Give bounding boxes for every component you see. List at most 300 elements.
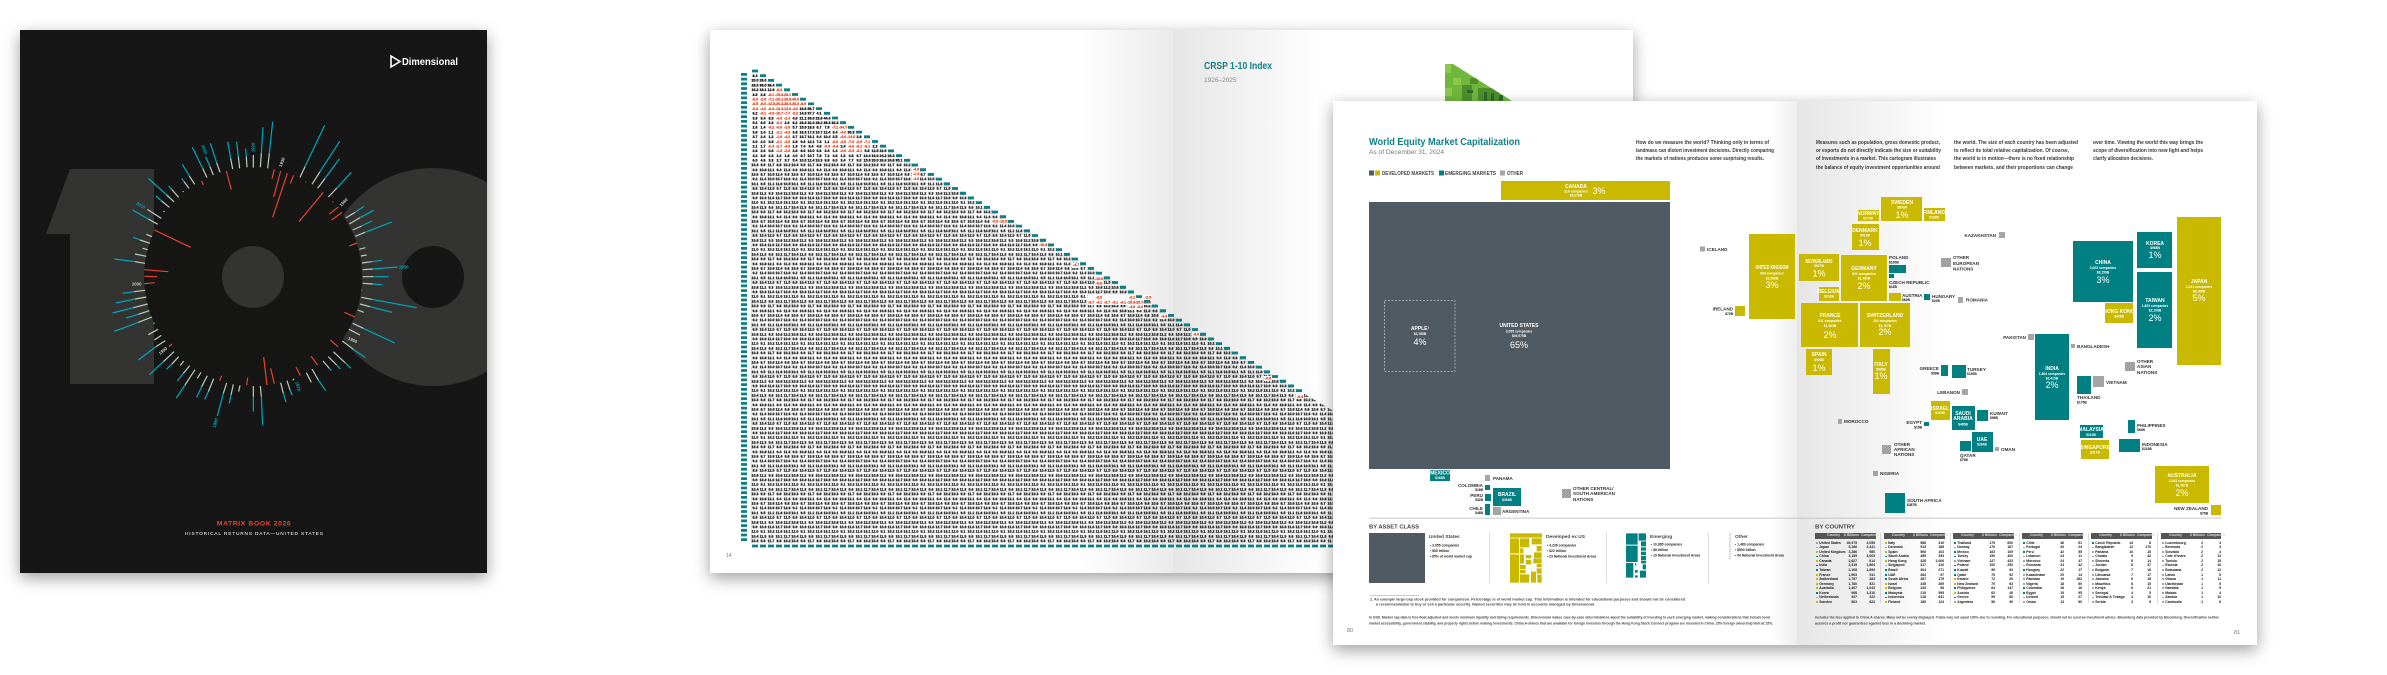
paragraph column 2: between markets, and their proportions can change xyxy=(1954,165,2073,171)
paragraph column 1: the balance of equity investment opportunities around xyxy=(1816,165,1940,171)
matrix red negative cells: -3.7 xyxy=(1088,300,1094,304)
matrix top rows: -1.3 xyxy=(776,149,782,153)
matrix top rows: -4.0 xyxy=(784,140,790,144)
asset class: Emerging: ▪ 19 National Investment Areas xyxy=(1651,554,1700,558)
other African nations xyxy=(1882,442,1915,457)
country: Taiwan xyxy=(2137,272,2172,348)
country table 2: $ Billions xyxy=(1913,533,1928,537)
country: Korea: $968B xyxy=(2150,246,2160,250)
asset class: United States: ▪ 3,055 companies xyxy=(1430,544,1459,548)
matrix top rows: 3.3 xyxy=(768,159,774,163)
matrix top rows: -2.1 xyxy=(776,140,782,144)
matrix top rows: -0.3 xyxy=(768,144,774,148)
matrix top rows: -4.8 xyxy=(848,144,854,148)
country: Egypt xyxy=(1906,420,1929,430)
matrix top rows: 4.8 xyxy=(832,154,838,158)
matrix top rows: 7.8 xyxy=(824,126,830,130)
paragraph column 1: or exports do not directly indicate the size or suitability xyxy=(1816,148,1941,154)
matrix top rows: -2.0 xyxy=(840,140,846,144)
country table 3: Thailand Norway Mexico Turkey Vietnam Poland Kuwait Qatar Ireland New Zealand Philippines Austria Greece Argentina xyxy=(1957,541,1978,604)
country: Chile: CHILE xyxy=(1469,506,1483,511)
matrix top rows: 12.1 xyxy=(808,140,814,144)
country: Malaysia xyxy=(2078,425,2104,438)
country: United States with Apple callout: 3,055 companies xyxy=(1506,330,1532,334)
matrix top rows: 5.7 xyxy=(792,126,798,130)
country: Panama: PANAMA xyxy=(1493,476,1514,481)
country: Spain: SPAIN xyxy=(1812,352,1827,358)
country: Kuwait: $96B xyxy=(1990,416,1999,420)
matrix top rows: 9.0 xyxy=(856,159,862,163)
legend xyxy=(1369,170,1523,177)
country: South Africa xyxy=(1885,493,1942,513)
country: Bangladesh: BANGLADESH xyxy=(2077,344,2110,349)
matrix top rows: 7.2 xyxy=(824,154,830,158)
matrix top rows: 37.7 xyxy=(808,112,814,116)
country: Netherlands xyxy=(1799,254,1839,281)
matrix top rows: -3.1 xyxy=(856,149,862,153)
other European nations: NATIONS xyxy=(1953,266,1973,272)
matrix top rows: 10.4 xyxy=(824,135,830,139)
country table 6: 2 2 2 2 2 2 2 1 1 1 1 1 1 1 xyxy=(2201,541,2203,604)
country: New Zealand xyxy=(2174,505,2221,516)
paragraph column 2: to reflect its total relative capitalization. Of course, xyxy=(1954,148,2069,154)
country: Switzerland: 263 companies xyxy=(1873,319,1897,323)
country: China: CHINA xyxy=(2095,260,2111,266)
country: China: 3% xyxy=(2096,275,2110,285)
country: United States with Apple callout: UNITED STATES xyxy=(1500,323,1539,329)
country: Saudi Arabia: SAUDI xyxy=(1955,411,1971,417)
country: New Zealand: NEW ZEALAND xyxy=(2174,506,2209,511)
matrix top rows: 3.4 xyxy=(824,149,830,153)
legend: DEVELOPED MARKETS xyxy=(1382,171,1435,177)
matrix top rows: 13.7 xyxy=(800,135,806,139)
matrix top rows: 3.9 xyxy=(752,93,758,97)
matrix top rows: 28.0 xyxy=(760,79,766,83)
matrix top rows: 3.8 xyxy=(792,130,798,134)
matrix top rows: 2.4 xyxy=(760,130,766,134)
matrix top rows: 3.4 xyxy=(832,130,838,134)
matrix top rows: 35.1 xyxy=(896,159,902,163)
matrix top rows: -0.3 xyxy=(824,144,830,148)
disclosure note: assures a profit nor guarantees against loss in a declining market. xyxy=(1815,620,1926,626)
matrix top rows: 2.1 xyxy=(752,144,758,148)
country: Denmark xyxy=(1852,224,1879,250)
country: Qatar xyxy=(1960,441,1976,462)
country: Italy: ITALY xyxy=(1874,362,1888,368)
country: Hungary: $22B xyxy=(1932,299,1941,303)
country: Denmark: 1% xyxy=(1858,238,1872,248)
other Central/South American nations: OTHER CENTRAL/ xyxy=(1573,486,1614,491)
page subheading years: 1926–2025 xyxy=(1204,77,1237,84)
country: Finland: FINLAND xyxy=(1923,210,1945,216)
other Central/South American nations: NATIONS xyxy=(1573,497,1593,502)
matrix top rows: 2.0 xyxy=(760,140,766,144)
matrix top rows: 8.6 xyxy=(800,149,806,153)
footnote 1: 1. An example large-cap stock provided for comparison. Percentage is of world market cap. This information is intended for educational purposes and should not be considered xyxy=(1370,596,1686,602)
country table 3: $ Billions xyxy=(1982,533,1997,537)
country: United States with Apple callout xyxy=(1369,202,1670,469)
country: Poland: POLAND xyxy=(1889,255,1909,260)
cover subtitle: HISTORICAL RETURNS DATA—UNITED STATES xyxy=(185,531,323,537)
matrix top rows: 1.2 xyxy=(768,135,774,139)
matrix top rows: 18.3 xyxy=(808,126,814,130)
matrix top rows: 8.3 xyxy=(768,116,774,120)
asset class: Developed ex US: ▪ 23 National Investment Areas xyxy=(1547,554,1596,558)
country: Poland: $100B xyxy=(1889,260,1899,264)
matrix top rows: -4.0 xyxy=(792,107,798,111)
matrix year axis bottom xyxy=(752,545,1333,547)
country: Czech Republic: $13B xyxy=(1889,285,1898,289)
country: France xyxy=(1801,303,1858,347)
country: United Arab Emirates: $284B xyxy=(1977,442,1987,446)
matrix top rows: -1.9 xyxy=(776,135,782,139)
country table 4: 46 40 32 24 24 24 22 20 19 18 16 15 15 13 xyxy=(2060,541,2064,604)
country: Belgium: BELGIUM xyxy=(1817,289,1841,295)
decade labels on radial chart: 2020 xyxy=(200,144,209,155)
country: Canada: 316 companies xyxy=(1564,190,1588,194)
intro paragraph: the markets of nations produces some surprising results. xyxy=(1636,156,1764,162)
country: Brazil: $304B xyxy=(1502,498,1512,502)
matrix top rows: 2.4 xyxy=(760,135,766,139)
matrix red negative cells: -1.4 xyxy=(913,172,919,176)
matrix top rows: 8.2 xyxy=(792,121,798,125)
asset class: Other: ▪ 1,489 companies xyxy=(1735,542,1764,546)
country: New Zealand: $70B xyxy=(2200,512,2209,516)
country: Pakistan: PAKISTAN xyxy=(2003,335,2027,340)
country table 3: 600 187 105 400 423 250 93 52 20 63 147 40 60 30 xyxy=(2007,541,2013,604)
country: Sweden: SWEDEN xyxy=(1891,200,1913,206)
matrix top rows: -3.4 xyxy=(832,144,838,148)
country table 5 xyxy=(2091,533,2155,604)
matrix top rows: -2.6 xyxy=(784,126,790,130)
country: Austria xyxy=(1889,293,1923,302)
matrix top rows: 38.4 xyxy=(768,83,774,87)
paragraph column 2: the world. The size of each country has been adjusted xyxy=(1954,140,2078,146)
country: Canada xyxy=(1501,181,1670,200)
matrix top rows: -6.5 xyxy=(752,102,758,106)
cartogram: Americas xyxy=(1369,181,1670,515)
country: United Kingdom: UNITED KINGDOM xyxy=(1756,265,1788,271)
matrix top rows: -4.3 xyxy=(776,116,782,120)
country: Oman xyxy=(1995,447,2016,452)
country: Thailand: $175B xyxy=(2077,400,2087,404)
country: Peru: PERU xyxy=(1470,493,1484,498)
country: Pakistan xyxy=(2003,334,2034,340)
matrix top rows: 6.2 xyxy=(752,112,758,116)
methodology note xyxy=(1369,614,1773,626)
country: Lebanon xyxy=(1937,389,1968,395)
country: Philippines: PHILIPPINES xyxy=(2137,423,2166,428)
matrix top rows: 12.5 xyxy=(872,149,878,153)
country: United States with Apple callout: 4% xyxy=(1413,337,1427,347)
panel: open book returns matrix spread xyxy=(710,30,1633,573)
matrix top rows: 12.4 xyxy=(824,130,830,134)
matrix red negative cells: -10.0 xyxy=(1095,277,1103,281)
country: United States with Apple callout: APPLE¹ xyxy=(1411,326,1429,332)
country: France: FRANCE xyxy=(1820,313,1841,319)
matrix top rows: 3.4 xyxy=(840,159,846,163)
matrix top rows: 10.3 xyxy=(816,159,822,163)
matrix top rows: -0.9 xyxy=(848,149,854,153)
cover title: MATRIX BOOK 2026 xyxy=(217,520,291,528)
matrix top rows: 23.8 xyxy=(816,116,822,120)
other European nations xyxy=(1941,255,1980,272)
matrix top rows: 1.1 xyxy=(824,140,830,144)
matrix top rows: 2.6 xyxy=(760,149,766,153)
other African nations: AFRICAN xyxy=(1894,447,1915,452)
matrix red negative cells: -4.3 xyxy=(913,168,919,172)
country: Oman: OMAN xyxy=(2001,447,2016,452)
gutter shading right xyxy=(1173,30,1323,573)
matrix top rows: 33.0 xyxy=(808,116,814,120)
asset class: Other xyxy=(1730,533,1784,560)
matrix top rows: 39.3 xyxy=(824,121,830,125)
country: Israel: ISRAEL xyxy=(1931,406,1949,412)
matrix top rows: -8.9 xyxy=(800,102,806,106)
footnote 1: a recommendation to buy or sell a particular security. Named securities may be held in accounts managed by Dimensional. xyxy=(1376,602,1595,606)
matrix top rows: -3.2 xyxy=(792,112,798,116)
matrix red negative cells: -4.9 xyxy=(913,177,919,181)
matrix top rows: 32.3 xyxy=(808,121,814,125)
matrix top rows: 24.2 xyxy=(880,154,886,158)
matrix top rows: -26.3 xyxy=(775,102,783,106)
matrix top rows: -4.0 xyxy=(840,135,846,139)
country: Lebanon: LEBANON xyxy=(1937,390,1961,395)
matrix red negative cells: -2.1 xyxy=(1129,296,1135,300)
matrix top rows: 4.2 xyxy=(752,154,758,158)
asset class: United States: ▪ $50 trillion xyxy=(1430,549,1449,553)
matrix top rows: -4.6 xyxy=(840,130,846,134)
country: Greece: GREECE xyxy=(1920,366,1939,371)
matrix top rows: -7.1 xyxy=(864,140,870,144)
matrix top rows: -6.3 xyxy=(768,107,774,111)
other Asian nations: ASIAN xyxy=(2137,364,2152,369)
intro paragraph: How do we measure the world? Thinking only in terms of xyxy=(1636,140,1769,146)
country table 3: 175 170 163 150 127 100 96 75 72 70 64 62 59 56 xyxy=(1989,541,1995,604)
paragraph column 3: clarify allocation decisions. xyxy=(2093,156,2153,162)
matrix red negative cells: -3.6 xyxy=(1193,333,1199,337)
cartogram: Europe xyxy=(1700,197,1989,394)
country: Mexico: MEXICO xyxy=(1430,470,1450,476)
footnote 1 xyxy=(1370,596,1686,606)
country: Australia xyxy=(2155,466,2209,503)
matrix top rows: 4.1 xyxy=(816,112,822,116)
country table 3 xyxy=(1953,533,2017,604)
matrix top rows: -28.1 xyxy=(783,93,791,97)
matrix top rows: 7.8 xyxy=(816,154,822,158)
country: Colombia: $16B xyxy=(1475,488,1484,492)
country: Argentina: ARGENTINA xyxy=(1502,509,1530,514)
matrix top rows: 26.6 xyxy=(880,159,886,163)
Dimensional logo: Dimensional xyxy=(402,57,458,68)
country: Finland: $189B xyxy=(1929,216,1939,220)
matrix year axis left xyxy=(741,73,747,541)
country table 6: $ Billions xyxy=(2190,533,2205,537)
matrix top rows: -19.3 xyxy=(775,93,783,97)
country table 1: $ Billions xyxy=(1844,533,1859,537)
matrix top rows: 56.7 xyxy=(808,107,814,111)
matrix top rows: 9.8 xyxy=(864,149,870,153)
page number 80: 80 xyxy=(1347,628,1353,634)
matrix top rows: 14.3 xyxy=(800,112,806,116)
country: Sweden: 1% xyxy=(1895,210,1909,220)
country table 1: 49,975 5,186 3,286 3,159 2,627 2,415 2,108 1,903 1,797 1,780 1,467 968 927 803 xyxy=(1847,541,1857,604)
country: Japan: 2,441 companies xyxy=(2186,285,2212,289)
country: India xyxy=(2035,334,2069,420)
other African nations: OTHER xyxy=(1894,442,1911,447)
matrix top rows: 28.0 xyxy=(752,83,758,87)
country: United Kingdom: 3% xyxy=(1765,280,1779,290)
country: Korea: 1% xyxy=(2148,250,2162,260)
country: Poland xyxy=(1889,255,1909,273)
other European nations: EUROPEAN xyxy=(1953,261,1980,266)
asset class: Other: ▪ $500 billion xyxy=(1735,548,1756,552)
matrix red negative cells: -15.3 xyxy=(1127,300,1135,304)
matrix top rows: -7.1 xyxy=(832,126,838,130)
country: Canada: CANADA xyxy=(1565,184,1587,190)
country: Sweden xyxy=(1881,197,1922,221)
legend: OTHER xyxy=(1507,171,1523,177)
matrix red negative cells xyxy=(912,167,1304,399)
country: Netherlands: NETHERLANDS xyxy=(1806,259,1833,265)
matrix top rows: -3.2 xyxy=(768,126,774,130)
matrix top rows: -13.4 xyxy=(775,107,783,111)
country: Mexico: $163B xyxy=(1435,476,1445,480)
matrix top rows: -12.9 xyxy=(783,107,791,111)
country: India: INDIA xyxy=(2045,366,2059,372)
country: Thailand xyxy=(2077,376,2101,404)
country table 1: Companies xyxy=(1861,533,1879,537)
country table 4: Country xyxy=(2030,533,2043,537)
country: Saudi Arabia: $485B xyxy=(1958,422,1968,426)
matrix top rows: -4.0 xyxy=(760,107,766,111)
matrix top rows: 15.9 xyxy=(864,159,870,163)
country: Switzerland: 2% xyxy=(1878,327,1892,337)
matrix top rows: 23.3 xyxy=(800,121,806,125)
country: France: 511 companies xyxy=(1818,319,1842,323)
matrix top rows: -14.0 xyxy=(847,135,855,139)
matrix top rows: 20.0 xyxy=(752,79,758,83)
matrix top rows: 1.8 xyxy=(784,154,790,158)
country table 5: Czech Republic Bangladesh Panama Croatia Slovenia Jordan Bulgaria Lithuania Jamaica Mauritius Kenya Senegal Trinidad & Tobago Serbia xyxy=(2095,541,2125,604)
matrix top rows: 8.4 xyxy=(808,144,814,148)
matrix top rows: 1.1 xyxy=(768,130,774,134)
matrix top rows: -7.1 xyxy=(768,98,774,102)
disclosure note: Includes the fees applied to China A-shares. Many not be evenly displayed. Totals may not equal 100% due to rounding. For educational purposes; should not be used as investment advice. Bloomberg data provided by Bloomberg. Diversification neither xyxy=(1815,614,2219,620)
methodology note: market accessibility, government stability, and property rights before making investments. China A-shares that are available for foreign investors through the Hong Kong Stock Connect program are included in China. 25% foreign ownership limit at 25%. xyxy=(1369,620,1773,626)
decade labels on radial chart: 1950 xyxy=(399,265,409,270)
country: Singapore xyxy=(2080,440,2111,459)
country: Thailand: THAILAND xyxy=(2077,395,2101,400)
matrix top rows xyxy=(752,74,902,163)
country: United Kingdom: $3,286B xyxy=(1766,276,1779,280)
country: Australia: AUSTRALIA xyxy=(2168,473,2197,479)
matrix top rows: -8.1 xyxy=(856,144,862,148)
country: Netherlands: 1% xyxy=(1812,268,1826,278)
country: Philippines: $64B xyxy=(2137,428,2146,432)
country table 3: Companies xyxy=(1999,533,2017,537)
country: Spain: 1% xyxy=(1812,363,1826,373)
matrix red negative cells: -4.1 xyxy=(1096,300,1102,304)
decade labels on radial chart: 1940 xyxy=(338,197,349,207)
country: Chile xyxy=(1469,504,1490,515)
matrix top rows: 6.0 xyxy=(832,159,838,163)
matrix top rows: 22.9 xyxy=(880,149,886,153)
matrix top rows: -40.0 xyxy=(791,98,799,102)
paragraph column 2 xyxy=(1954,140,2078,171)
asset class: United States: ▪ 65% of world market cap xyxy=(1430,554,1472,558)
matrix top rows: 0.6 xyxy=(768,149,774,153)
country: Japan xyxy=(2177,217,2221,365)
asset class: Developed ex US: Developed ex US xyxy=(1546,534,1586,540)
green heat map chart fragment xyxy=(1445,64,1515,101)
country: Taiwan: TAIWAN xyxy=(2145,298,2165,304)
decade labels on radial chart: 1930 xyxy=(278,156,286,168)
decade labels on radial chart: 1926 xyxy=(251,142,256,152)
other Asian nations xyxy=(2125,359,2157,375)
as-of date: As of December 31, 2024 xyxy=(1369,149,1444,156)
panel: book cover xyxy=(20,30,542,573)
matrix top rows: 3.5 xyxy=(832,135,838,139)
asset class: Developed ex US xyxy=(1510,533,1596,583)
country: Argentina xyxy=(1493,507,1530,515)
matrix top rows: 16.0 xyxy=(872,154,878,158)
paragraph column 1 xyxy=(1816,140,1941,171)
country table 1 xyxy=(1815,533,1879,604)
country: Japan: 5% xyxy=(2192,293,2206,303)
country: United Arab Emirates: UAE xyxy=(1977,437,1988,443)
country: Korea xyxy=(2137,232,2172,268)
country: China: $3,159B xyxy=(2097,270,2110,274)
country table 4: 61 24 55 11 47 42 17 14 162 60 16 95 27 60 xyxy=(2076,541,2082,604)
country: Indonesia: INDONESIA xyxy=(2142,442,2168,447)
matrix red negative cells: -4.3 xyxy=(1161,314,1167,318)
matrix top rows: 12.6 xyxy=(768,88,774,92)
matrix top rows: 1.4 xyxy=(760,126,766,130)
country: Romania xyxy=(1958,297,1989,303)
matrix top rows: 30.3 xyxy=(848,130,854,134)
matrix top rows: 2.7 xyxy=(776,159,782,163)
matrix top rows: 2.8 xyxy=(792,149,798,153)
matrix red negative cells: -2.3 xyxy=(1145,296,1151,300)
country table 5: $ Billions xyxy=(2120,533,2135,537)
matrix top rows: -8.4 xyxy=(776,88,782,92)
decade labels on radial chart xyxy=(132,142,409,428)
country: Singapore: SINGAPORE xyxy=(2080,445,2111,451)
country: Austria: $62B xyxy=(1902,298,1911,302)
country: Kuwait xyxy=(1977,410,2008,421)
country: Hong Kong: $428B xyxy=(2114,314,2124,318)
matrix top rows: 3.3 xyxy=(768,121,774,125)
matrix red negative cells: -25.7 xyxy=(1135,300,1143,304)
country: Canada: 3% xyxy=(1592,186,1606,196)
country: Germany xyxy=(1841,255,1887,301)
matrix red negative cells: -2.0 xyxy=(1096,296,1102,300)
country: Hong Kong: HONG KONG xyxy=(2103,309,2135,315)
paragraph column 1: of investments in a market. This cartogram illustrates xyxy=(1816,156,1936,162)
country table 4: Companies xyxy=(2068,533,2086,537)
country: Ireland: IRELAND xyxy=(1713,306,1734,312)
matrix red negative cells: -4.8 xyxy=(1129,305,1135,309)
matrix top rows: -34.7 xyxy=(839,126,847,130)
country table 2: 310 188 103 253 1,006 410 271 97 175 269 98 595 631 124 xyxy=(1936,541,1944,604)
country: Kuwait: KUWAIT xyxy=(1990,411,2008,416)
matrix top rows: 16.3 xyxy=(800,130,806,134)
matrix top rows: 9.2 xyxy=(752,121,758,125)
country: United Arab Emirates xyxy=(1972,432,1993,452)
decade labels on radial chart: 2000 xyxy=(132,282,142,287)
country: Spain xyxy=(1806,349,1832,375)
